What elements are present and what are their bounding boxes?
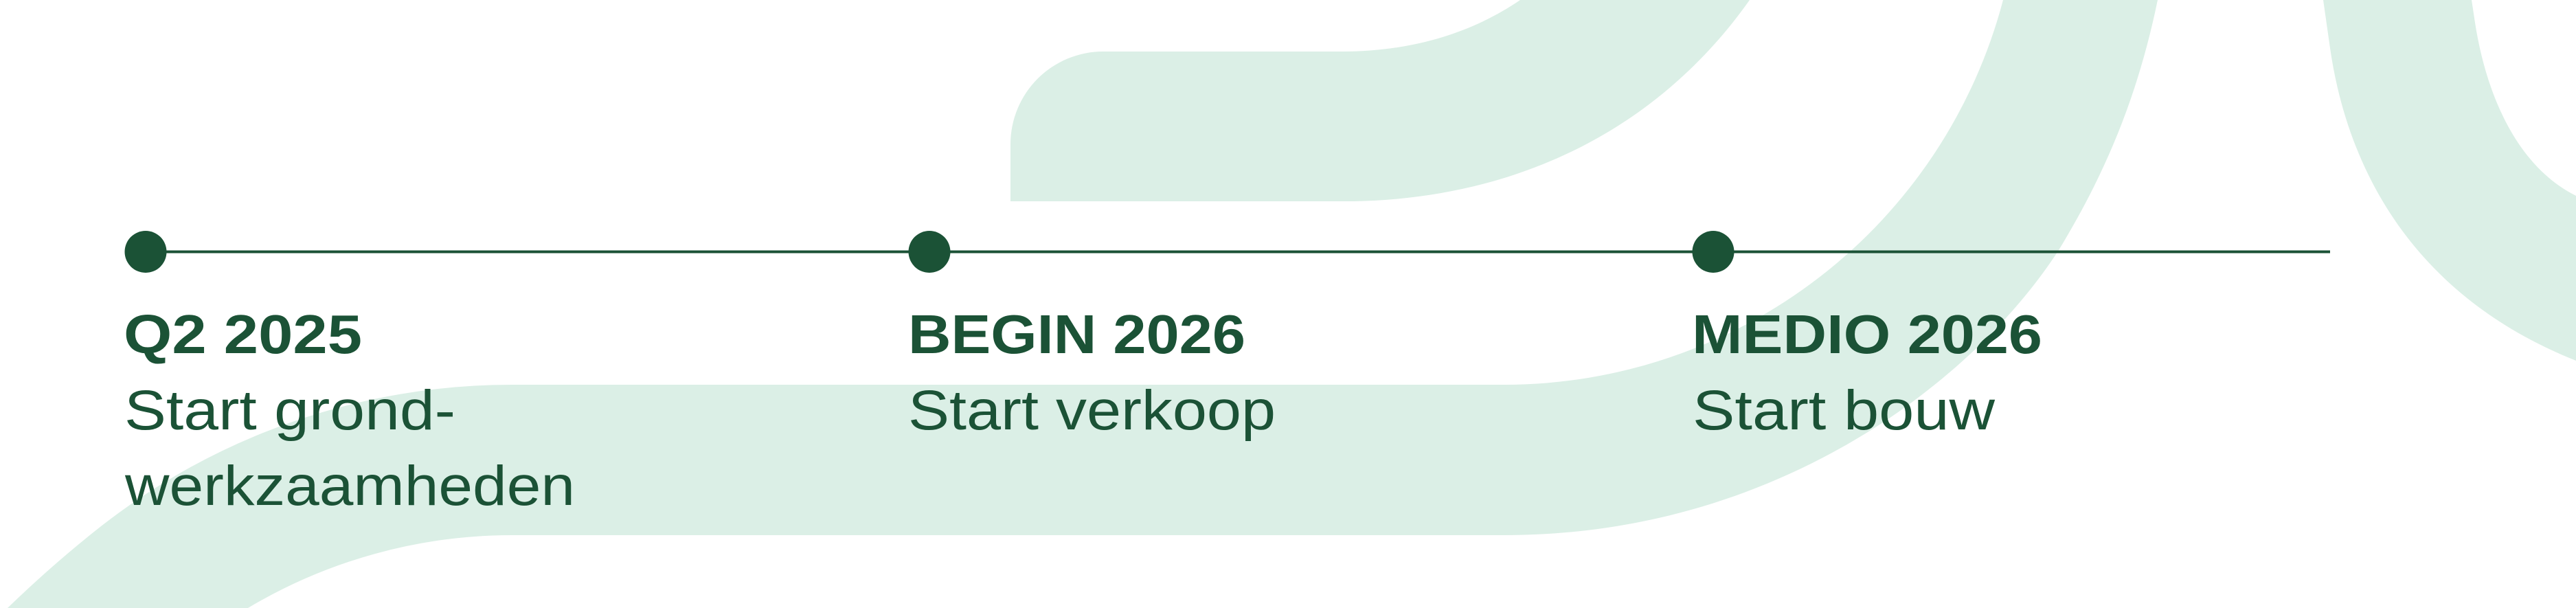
marker dot (1693, 231, 1734, 273)
marker dot (125, 231, 166, 273)
description line 2: werkzaamheden (124, 455, 575, 517)
milestone: Q2 2025 (124, 231, 575, 517)
date heading: MEDIO 2026 (1692, 304, 2042, 365)
description: Start verkoop (908, 379, 1276, 442)
description: Start bouw (1693, 379, 1996, 442)
background shape: top centre rounded band (1010, 0, 1750, 201)
description: Start grond- (124, 379, 455, 442)
date heading: Q2 2025 (124, 304, 362, 365)
timeline line (146, 250, 2330, 253)
milestone: Medio 2026 (1692, 231, 2042, 442)
date heading: BEGIN 2026 (908, 304, 1245, 365)
marker dot (908, 231, 951, 273)
background shape: right curve (2323, 0, 2576, 361)
milestone: Begin 2026 (908, 231, 1276, 442)
